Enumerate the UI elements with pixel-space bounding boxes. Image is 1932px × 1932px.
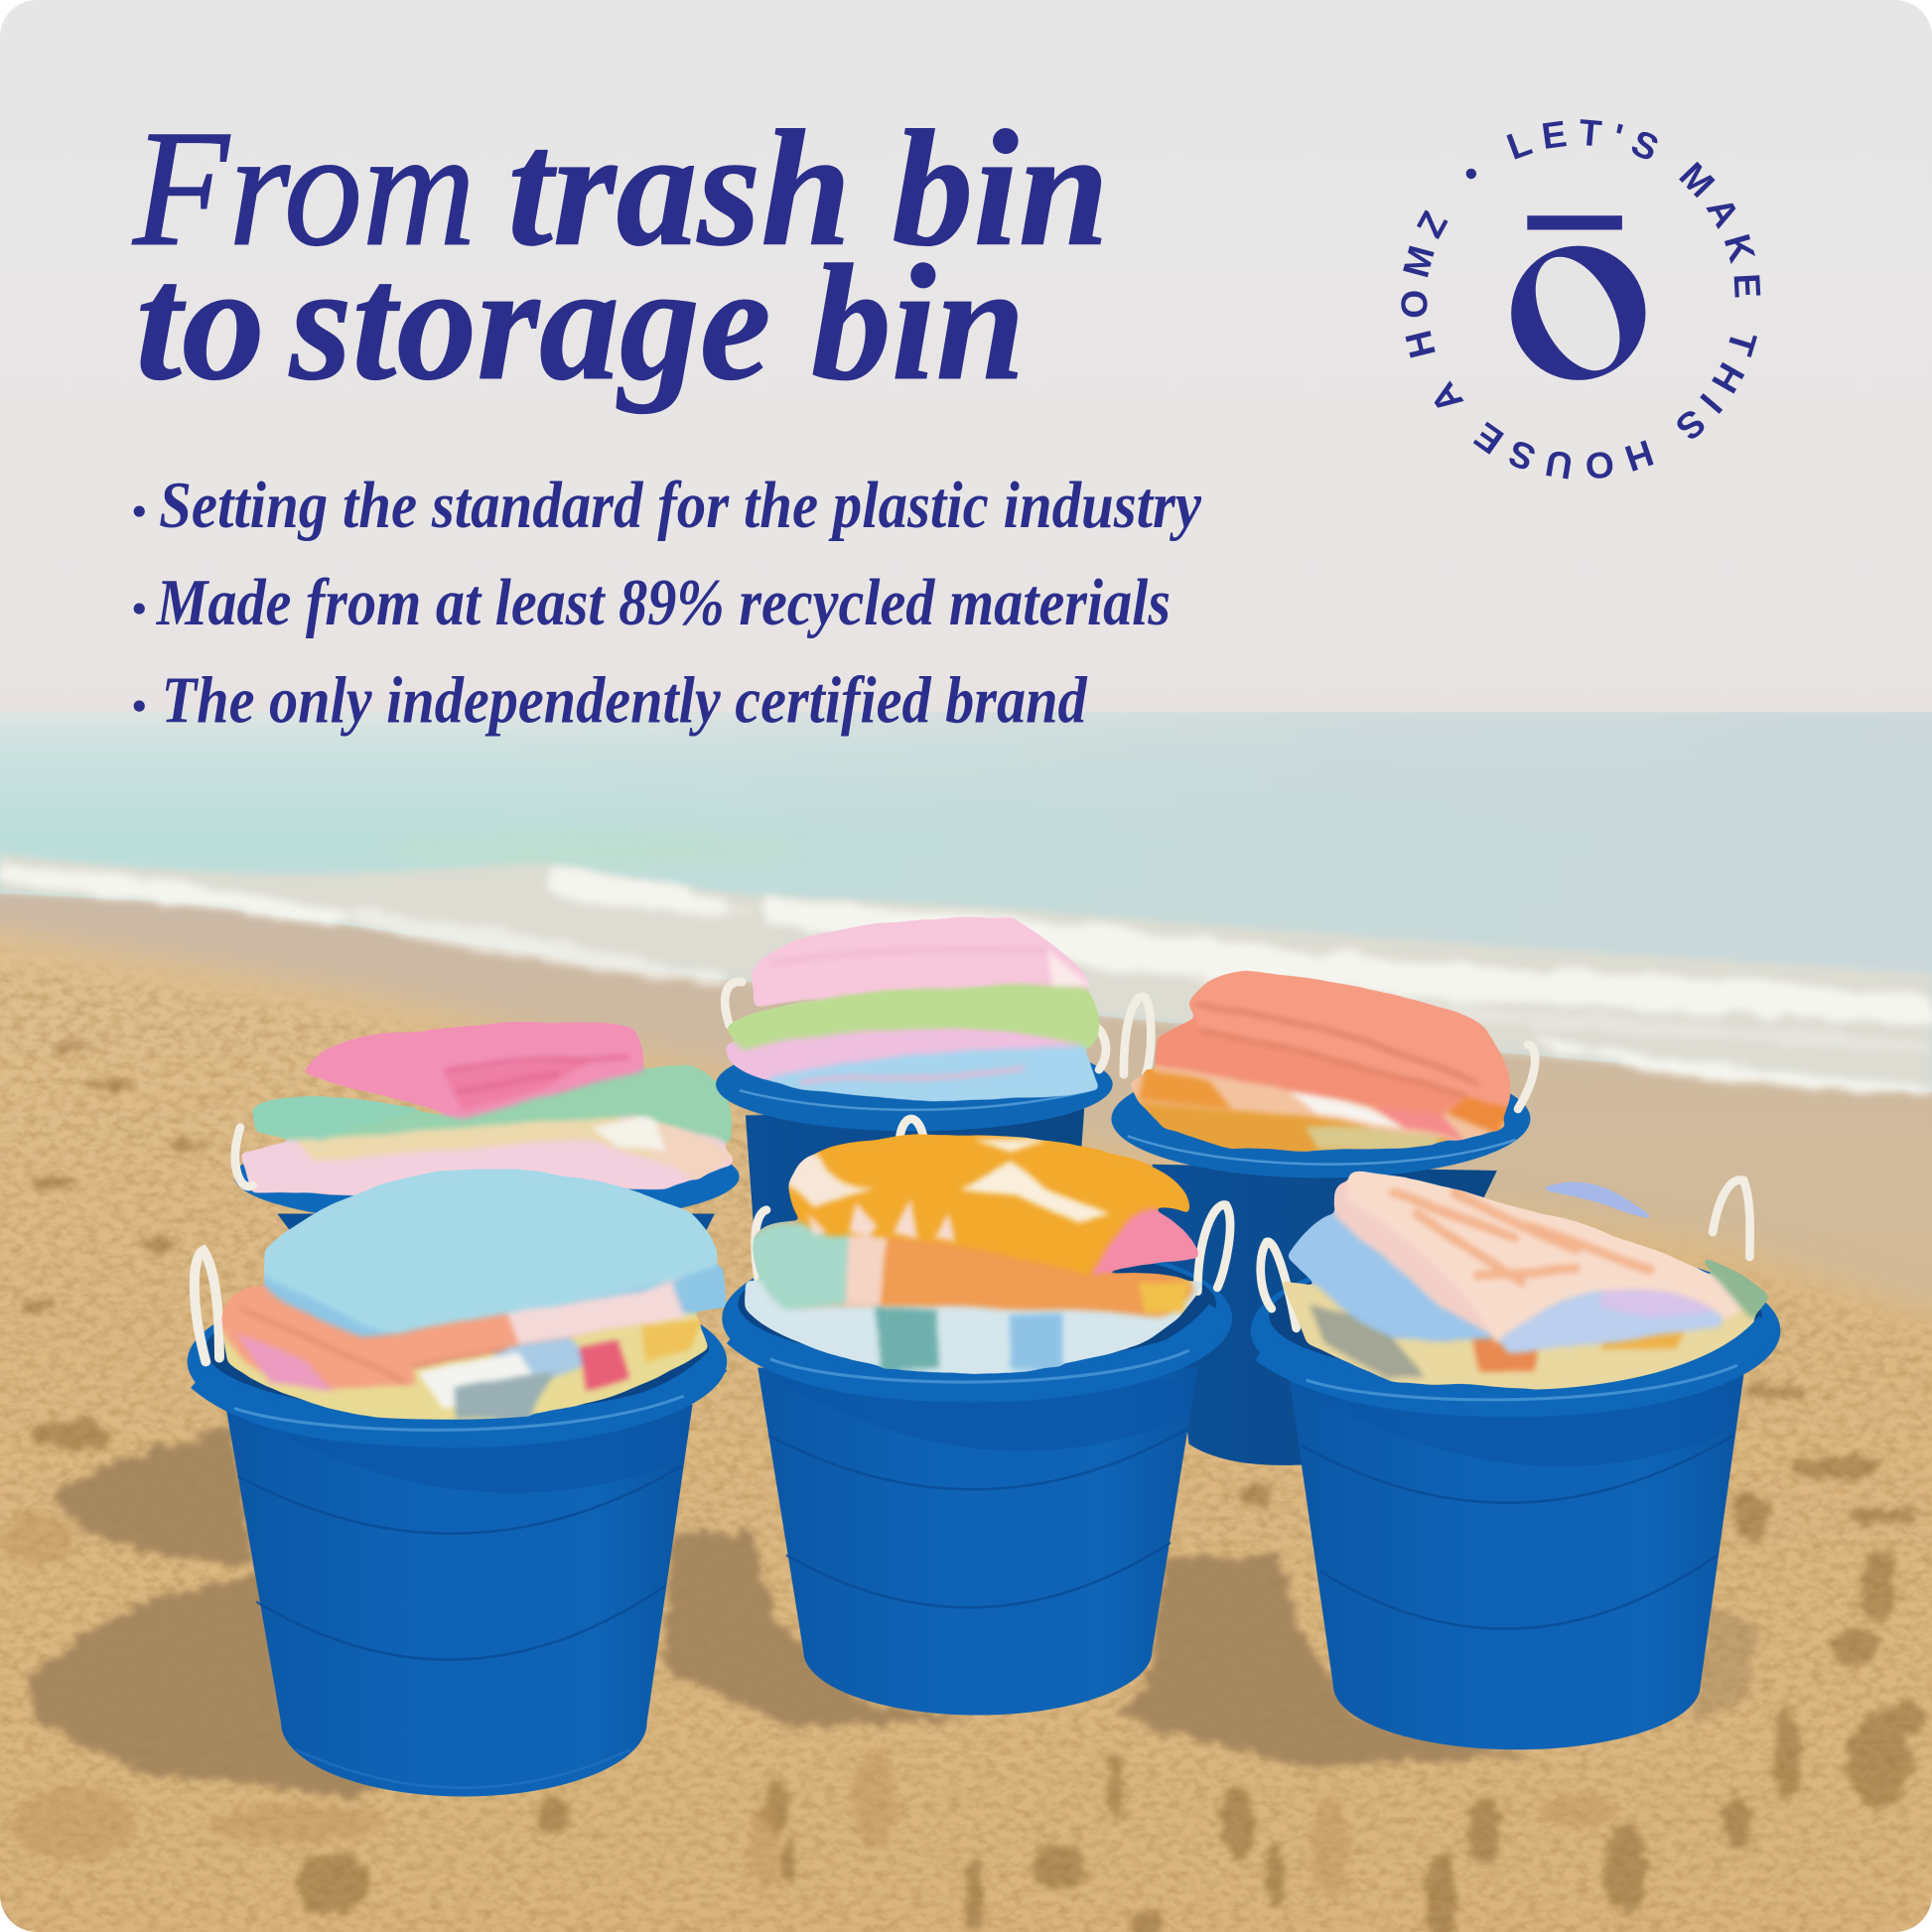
bucket: back centre [716,918,1113,1368]
folded towels [727,918,1101,1100]
bullet list: Made from at least 89% recycled materials [156,566,1171,639]
folded towels [240,1022,735,1195]
bottom edge [296,1749,630,1788]
bucket shadows [31,1430,1756,1800]
folded towels [746,1135,1201,1374]
rope handles [756,1119,1230,1292]
bucket: front centre [722,1119,1232,1716]
ribs [238,1466,681,1660]
rope handles [1124,997,1535,1109]
separator dot [1466,169,1476,179]
bucket: front left [188,1170,727,1796]
dry sand [0,918,1932,1932]
body [746,1109,1084,1368]
circular slogan: LET'S MAKE THIS HOUSE A HOMZ [1401,119,1761,479]
body [758,1368,1197,1716]
title: storage bin [289,231,1026,415]
footprints [17,1042,1928,1932]
rope handle [235,1128,252,1186]
folded towels [1131,972,1509,1151]
title [132,97,1109,415]
sea [0,712,1932,1119]
letter o mark [1511,243,1645,384]
title: trash bin [507,97,1109,281]
shallow water [0,854,1932,1092]
upper shading [1294,1386,1737,1466]
rim [716,1037,1113,1131]
wet sand [0,894,1932,1355]
bucket: back left [234,1022,740,1238]
rim [722,1235,1232,1402]
bucket: back right [1111,972,1535,1465]
surf foam [0,854,1932,1094]
rim [1111,1059,1530,1177]
macron bar [1527,215,1622,229]
rim [188,1276,727,1448]
upper shading [763,1380,1189,1451]
rope handles [1261,1179,1750,1328]
body [225,1405,692,1796]
sky [0,0,1932,721]
rim [234,1128,740,1226]
body [277,1213,715,1231]
ribs [768,1430,1186,1607]
body [1152,1165,1497,1465]
upper shading [234,1417,688,1493]
bullet list: The only independently certified brand [162,663,1088,737]
bucket: front right [1251,1171,1780,1749]
front rim [1263,1324,1769,1404]
ribs [1302,1436,1733,1629]
rim [1251,1244,1780,1417]
rope handles [725,982,1106,1069]
logo badge [1401,119,1761,479]
folded towels [1282,1171,1768,1390]
sand texture [0,924,1932,1932]
rope handle [195,1251,219,1361]
white wave crests [0,860,1932,1094]
title: to [136,231,265,415]
front rim [736,1312,1220,1389]
folded towels [221,1170,727,1423]
bullet list: Setting the standard for the plastic industry [159,469,1201,542]
bullet list [134,469,1201,737]
front rim [200,1361,717,1433]
body [1288,1368,1744,1749]
title: From [132,97,476,281]
